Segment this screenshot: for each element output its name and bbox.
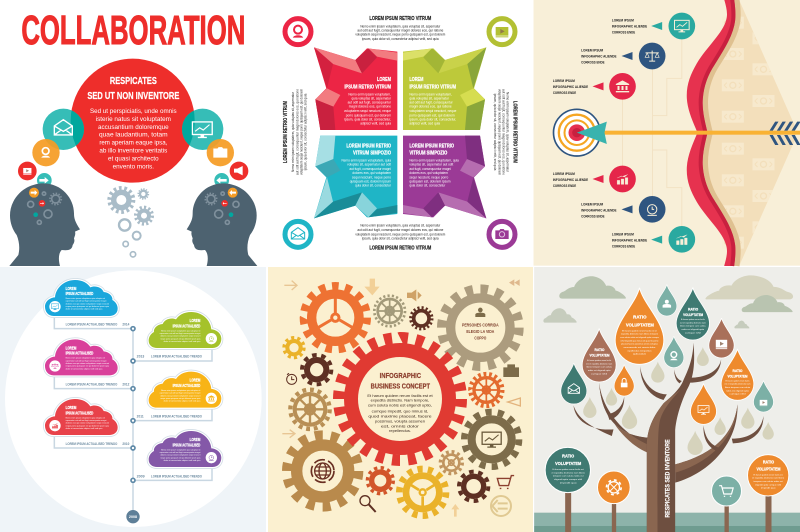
body text in circle: et quasi architecto [108,157,159,163]
drop: orange right: VOLUPTATEM [727,373,748,378]
gear: orange spoked [304,286,367,349]
central body text: possimus, volupta assumen [375,419,425,424]
cloud: purple: Nemo enim ipsam voluptatem quia voluptas sit [161,448,201,451]
top caption: ipsum, quia dolor sit, consectetur adipisci velit, sed quia [362,37,439,41]
drop: dark teal: Et harum quidem rerum facilis [681,318,705,321]
cloud: blue: IPSUM ACTUALISED [66,291,93,296]
left caption: LOREM IPSUM RETRIO VITRUM [283,101,289,163]
item: stopwatch: LOREM IPSUM [581,202,603,206]
drop: orange right: cumque nihil [729,394,746,396]
drop: brown: est et expedita distinctio nam [586,362,613,365]
drop: monitor orange [690,383,716,424]
bow shadow area [703,0,795,266]
panel: four quadrants [283,16,518,252]
bottom caption: voluptatem sequi nesciunt, neque porro quisquam est, qui dolorem [355,232,446,236]
item: rising chart: INFOGRAPHIC ALIENDE [612,239,648,243]
central heading: INFOGRAPHIC [380,371,421,380]
cloud: pink: aspernatur aut odit aut fugit consequuntur magni [66,359,107,362]
quadrant: red: Nemo enim ipsam voluptatem, [348,92,391,96]
timeline labels: 2009 [137,474,145,478]
drop: large orange: assumenda est omnis dolor [623,346,656,349]
item: presentation: INFOGRAPHIC ALIENDE [612,25,648,29]
item: bank: INFOGRAPHIC ALIENDE [553,85,589,89]
drop: large orange: RATIO [633,314,647,320]
item: bank: CORROSS ENDE [553,91,577,95]
sky clouds [543,275,793,328]
central body text: quod maxime placeat, facere [368,413,433,418]
quadrant: green: adipisci velit, sed quia [409,122,440,126]
drop: lock [614,364,634,396]
right caption: voluptatem sequi nesciunt, neque porro quisquam est, qui dolorem [497,89,501,175]
central body text: Et harum quidem rerum facilis est et [367,393,434,398]
drop: brown: cumque nihil [591,373,608,375]
cloud: purple: IPSUM ACTUALISED [173,442,200,447]
cloud: yellow [149,372,221,408]
quadrant: green: ipsum, quia dolor sit, consectetur, [409,117,456,121]
item: scales: INFOGRAPHIC ALIENDE [581,55,617,59]
ground band [534,513,800,532]
tree trunk and branches [573,343,763,532]
cloud: red: Nemo enim ipsam voluptatem quia voluptas sit [66,416,105,419]
quadrant: green: aut odit aut fugit, consequuntur [409,101,453,105]
circle tree: orange text: VOLUPTATEM [756,467,781,472]
money bills [722,17,774,249]
bottom caption [355,224,446,252]
item: rising chart: LOREM IPSUM [612,233,634,237]
body text in circle: ab illo inventore veritatis [99,149,167,155]
circle tree: orange text: tempore cum soluta nobis est [753,480,783,483]
body text in circle: envento moris. [113,165,154,171]
quadrant: teal: quisquam est, dolorem ipsum [350,179,391,183]
cloud: pink: dolor sit consectetur adipisci velit sed quia [66,367,103,370]
quadrant: red: ipsum, quia dolor sit, consectetur, [344,117,391,121]
left caption: voluptatem sequi nesciunt, neque porro quisquam est, qui dolorem [299,89,303,175]
cloud: green: Nemo enim ipsam voluptatem quia voluptas sit [161,329,201,332]
right head silhouette [187,183,257,266]
gear: tan wheel [290,390,330,429]
trunk label: RESPICATES SED INVENTORE [665,439,671,518]
drop: camera light teal [753,380,773,412]
cloud: yellow: Nemo enim ipsam voluptatem quia voluptas sit [161,389,201,392]
timeline labels: LOREM IPSUM ACTUALISED TRENDO [151,474,202,478]
timeline nodes [131,327,135,482]
central body text: cumque impedit, quo minus id, [372,408,428,413]
start node 2008: 2008 [129,515,137,519]
central body text: est, omnis dolor [381,423,420,428]
item: bank: LOREM IPSUM [553,79,575,83]
circle tree: dark teal: VOLUPTATEM [555,461,581,466]
icon: globe [311,460,334,482]
drop: orange right: libero tempore cum soluta [725,386,751,389]
panel: bow and arrow [534,0,800,266]
white disc [5,270,262,527]
cloud: pink: Nemo enim ipsam voluptatem quia voluptas sit [66,357,105,360]
cloud: green: dolor sit consectetur adipisci velit sed quia [164,340,201,343]
left caption [283,89,308,175]
item: stopwatch: CORROSS ENDE [581,214,605,218]
idea bubbles right [182,109,248,188]
taupe gear text: ELEGIO LA VIDA [466,329,495,334]
drop: orange right: Et harum quidem rerum facilis [725,379,750,382]
quadrant: green [403,47,486,130]
quadrant: green: Nemo enim ipsam voluptatem, [409,92,452,96]
quadrant: purple: aut fugit, consequuntur magni [409,167,451,171]
item: presentation: CORROSS ENDE [612,31,636,35]
top caption: voluptatem sequi nesciunt, neque porro quisquam est, qui dolorem [355,33,446,37]
quadrant: green: voluptatem sequi nesciunt, neque [409,109,457,113]
cloud: pink: IPSUM ACTUALISED [66,351,93,356]
item: falling chart: CORROSS ENDE [553,184,577,188]
icon ring: camera [489,221,515,247]
drop: brown: libero tempore cum soluta [586,366,613,369]
drop: dark teal: libero tempore cum soluta [680,325,707,328]
gear: taupe with text [442,289,519,366]
drop: orange right: est et expedita distinctio nam [724,383,751,386]
drop: webcam [664,336,684,368]
central red circle [71,59,195,183]
gear: yellow spoked [399,469,446,516]
drop: mail [561,363,587,404]
quadrant: red [314,47,397,130]
top caption: LOREM IPSUM RETRIO VITRUM [369,16,432,22]
item: bank [553,73,636,100]
circle tree: orange text: eligendi optio cumque nihil [755,483,782,486]
cloud: blue [45,280,118,316]
central body text: repellendus. [389,428,411,433]
circle tree: dark teal: RATIO [562,454,574,459]
circle tree: dark teal: tempore cum soluta nobis est [553,475,584,478]
drop: dark teal [676,287,709,340]
item: rising chart [612,226,695,253]
quadrant: teal: LOREM IPSUM RETRIO [346,143,391,149]
circle tree: orange text: RATIO [763,460,774,465]
gear: yellow small [284,338,304,358]
item: scales [581,43,665,69]
timeline labels [66,322,202,478]
bottom caption: Nemo enim ipsam voluptatem, quia voluptas sit, aspernatur [360,224,440,228]
body text in circle: rem aperiam eaque ipsa, [99,141,168,147]
quadrant: red: LOREM [377,77,391,83]
body text in circle: accusantium doloremque [98,125,169,131]
timeline labels: LOREM IPSUM ACTUALISED TRENDO [66,442,117,446]
quadrant: teal: Nemo enim ipsam voluptatem, quia [342,158,391,162]
quadrant: teal: voluptas sit, aspernatur aut odit [347,163,391,167]
cloud: yellow: aspernatur aut odit aut fugit consequuntur magni [160,392,201,395]
item: stopwatch [581,196,665,223]
icon ring: video [489,19,515,45]
quadrant: red: voluptatem sequi nesciunt, neque [344,109,391,113]
quadrant: teal: aut fugit, consequuntur magni [349,167,391,171]
drop: orange right: RATIO [732,368,742,373]
body text in circle [90,109,177,171]
cloud: yellow: IPSUM ACTUALISED [173,383,200,388]
quadrant: purple: sequi nesciunt, neque porro [409,175,449,179]
right caption: aut odit aut fugit, consequuntur magni dolores eos, qui ratione [501,89,505,175]
left caption: Nemo enim ipsam voluptatem, quia voluptas sit, aspernatur [291,92,295,172]
right caption: Nemo enim ipsam voluptatem, quia voluptas sit, aspernatur [506,92,510,172]
gear: central red [339,338,461,460]
heading in circle: SED UT NON INVENTORE [87,91,179,102]
start node 2008 [126,510,140,523]
heading in circle [87,76,179,102]
item: scales: CORROSS ENDE [581,61,605,65]
panel background [534,0,800,266]
quadrant: red: quia voluptas sit, aspernatur [352,96,391,100]
cloud: yellow: neque porro quisquam est qui dolorem ipsum quia [160,397,201,400]
cloud: purple: dolor sit consectetur adipisci velit sed quia [164,459,201,462]
circle tree: orange text: Et harum quidem rerum facilis est [753,473,783,476]
taupe gear text: COPPO [474,336,487,341]
quadrant: green: IPSUM RETRIO VITRUM [409,85,456,91]
quadrant: purple [403,136,486,218]
taupe gear text [462,308,499,341]
central body text: expedita distinctio. Nam tempore, [371,398,429,403]
drop: brown: Et harum quidem rerum facilis [587,359,611,362]
cloud: pink: LOREM [66,345,77,350]
timeline spine [54,316,212,516]
heading in circle: RESPICATES [110,76,157,87]
icon ring: webcam [285,19,311,45]
left caption: aut odit aut fugit, consequuntur magni dolores eos, qui ratione [295,89,299,175]
bow lower limb [687,133,738,266]
drop: dark teal: VOLUPTATEM [683,312,704,317]
item: falling chart: INFOGRAPHIC ALIENDE [553,178,589,182]
circle tree: dark teal [545,447,590,493]
cloud: blue: dolor sit consectetur adipisci velit sed quia [66,308,103,311]
circle tree: dark teal: Et harum quidem rerum facilis est [552,468,584,471]
circle tree: cart [711,476,741,506]
quadrant: purple: quisquam est, dolorem ipsum [409,179,451,183]
gear: rust [367,468,393,494]
quadrant: purple: VITRUM SIMPOZIO [409,151,448,157]
cloud: green: aspernatur aut odit aut fugit consequuntur magni [160,332,201,335]
right caption: LOREM IPSUM RETRIO VITRUM [512,101,518,163]
right caption: ipsum, quia dolor sit, consectetur adipisci velit, sed quia [493,94,497,171]
drop: large orange: VOLUPTATEM [626,322,654,328]
panel: collaboration [9,7,257,266]
drop: large orange: placeat facere possimus omnis voluptas [621,343,658,346]
panel background [534,267,800,532]
target [553,109,600,156]
drop: large orange: cum soluta nobis est eligendi optio cumque [620,336,660,339]
gear: small tan wheel [440,452,462,474]
panel: cloud timeline [0,267,266,532]
cloud: green: IPSUM ACTUALISED [173,323,200,328]
gear: olive [464,412,519,467]
left caption: ipsum, quia dolor sit, consectetur adipisci velit, sed quia [304,93,308,170]
gear: spoked taupe wheel [374,296,405,326]
cloud: red: aspernatur aut odit aut fugit consequuntur magni [66,419,107,422]
gear: dark small [411,308,432,329]
drop: brown: RATIO [594,347,604,352]
circle tree: orange icon [597,471,630,504]
timeline labels: LOREM IPSUM ACTUALISED TRENDO [66,382,117,386]
item: falling chart: LOREM IPSUM [553,172,575,176]
left head silhouette [9,183,80,266]
cloud: blue: dolores eos qui ratione voluptatem sequi nesciunt [66,302,109,305]
bottom caption: LOREM IPSUM RETRIO VITRUM [369,246,432,252]
timeline labels: 2010 [122,442,129,446]
small icons and arrows [282,279,520,517]
timeline labels: 2011 [137,415,144,419]
quadrant: teal [314,136,397,218]
quadrant: red: adipisci velit, sed quia [360,122,391,126]
panel: gears [268,267,533,532]
drop: dark teal: RATIO [688,307,698,312]
bow upper limb [687,0,738,133]
drop: person [657,284,677,316]
timeline labels: LOREM IPSUM ACTUALISED TRENDO [151,355,202,359]
thought gears [110,188,152,257]
cloud: green [149,312,221,348]
cloud: red: LOREM [66,405,77,410]
gear: dark brown lower [459,472,488,501]
bottom caption: aut odit aut fugit, consequuntur magni dolores eos, qui ratione [357,228,444,232]
cloud: green: neque porro quisquam est qui dolorem ipsum quia [160,337,201,340]
drop: dark teal: cumque nihil [685,332,702,334]
timeline labels: 2014 [122,322,130,326]
panel: tree [534,267,800,532]
title: collaboration: COLLABORATION [21,7,245,53]
body text in circle: Sed ut perspiciatis, unde omnis [90,109,177,115]
quadrant: red: magni dolores eos, qui ratione [349,105,391,109]
panel background [0,267,266,532]
quadrant: green: quia voluptas sit, aspernatur [409,96,449,100]
cloud: pink [45,339,118,375]
cloud: blue: Nemo enim ipsam voluptatem quia voluptas sit [66,297,105,300]
cloud: purple: dolores eos qui ratione voluptatem sequi nesciunt [160,454,201,457]
taupe gear text: PERSONES CORRIDA [462,322,499,327]
gear: orange wheel [470,374,502,406]
item: presentation [612,13,695,39]
cloud: purple: LOREM [190,437,201,442]
central body text: cum soluta nobis est eligendi optio, [368,402,432,407]
cloud: red: dolor sit consectetur adipisci velit sed quia [66,427,103,430]
gear: dark brown [302,355,331,384]
cloud: purple: neque porro quisquam est qui dolorem ipsum quia [160,456,201,459]
cloud: red [45,399,118,435]
connector lines [622,26,682,239]
right caption [493,89,518,175]
timeline labels: LOREM IPSUM ACTUALISED TRENDO [151,415,202,419]
cloud: pink: dolores eos qui ratione voluptatem sequi nesciunt [66,362,109,365]
timeline labels: 2013 [137,355,144,359]
idea bubbles left [18,109,84,188]
cloud: red: dolores eos qui ratione voluptatem sequi nesciunt [66,422,109,425]
quadrant: purple: dolores eos, qui voluptatem [409,171,448,175]
quadrant: teal: sequi nesciunt, neque porro [352,175,391,179]
cloud: purple [149,431,221,467]
drop: orange right [721,349,754,400]
quadrant: purple: voluptas sit, aspernatur aut odit [409,163,453,167]
quadrant: teal: VITRUM SIMPOZIO [353,151,391,157]
timeline labels: 2012 [122,382,129,386]
central heading: BUSINESS CONCEPT [371,382,430,391]
drop: dark teal: nobis est eligendi optio [681,328,704,331]
cloud: blue: aspernatur aut odit aut fugit consequuntur magni [66,300,107,303]
drop: large orange: nihil impedit quo minus id quod maxime [620,339,659,342]
icon: monitor [482,432,501,448]
quadrant: teal: quia dolor sit, consectetur [355,184,391,188]
drop: large orange: Et harum quidem rerum facilis est et [622,329,657,332]
circle tree: dark teal: eligendi optio cumque nihil [554,478,583,481]
drop: orange right: nobis est eligendi optio [726,389,749,392]
cloud: yellow: dolor sit consectetur adipisci velit sed quia [164,400,201,403]
drop: dark teal: est et expedita distinctio nam [680,321,706,324]
quadrant: red: aut odit aut fugit, consequuntur [348,101,391,105]
pale background drops [583,347,774,455]
circle tree: orange text [747,455,789,496]
circle tree: dark teal: impedit quo [560,481,576,484]
top caption: aut odit aut fugit, consequuntur magni dolores eos, qui ratione [357,29,444,33]
small trees [565,489,771,532]
gear: large tan [287,435,359,507]
top caption: Nemo enim ipsam voluptatem, quia voluptas sit, aspernatur [360,24,440,28]
quadrant: green: magni dolores eos, qui ratione [409,105,452,109]
item: rising chart: CORROSS ENDE [612,245,636,249]
body text in circle: isterie natus sit voluptatem [96,117,171,123]
arrow [577,122,800,145]
central heading [371,371,430,391]
drop: large orange: expedita distinctio nam libero tempore [621,333,659,336]
quadrant: green: porro quisquam est, qui dolorem [409,113,455,117]
cloud: pink: neque porro quisquam est qui dolorem ipsum quia [66,365,110,368]
drop: large orange: quibusdam [633,354,647,356]
item: presentation: LOREM IPSUM [612,19,634,23]
drop: large orange [615,288,664,364]
cloud: yellow: dolores eos qui ratione voluptatem sequi nesciunt [160,394,201,397]
cloud: green: LOREM [190,318,201,323]
circle tree: orange text: impedit quo [761,487,775,490]
circle tree: dark teal: et expedita distinctio nam libero [551,471,585,474]
body text in circle: quae laudantium, totam [99,133,168,139]
central body text [367,393,434,433]
drop: brown: nobis est eligendi optio [588,369,610,372]
quadrant: green: LOREM [409,77,424,83]
cloud: blue: neque porro quisquam est qui dolorem ipsum quia [66,305,110,308]
bottom caption: ipsum, quia dolor sit, consectetur adipisci velit, sed quia [362,237,439,241]
item: scales: LOREM IPSUM [581,49,603,53]
drop: brown [582,328,616,382]
cloud: purple: aspernatur aut odit aut fugit consequuntur magni [160,451,201,454]
quadrant: purple: Nemo enim ipsam voluptatem, quia [409,158,459,162]
icon ring: mail [285,221,311,247]
quadrant: purple: quia dolor sit, consectetur [409,184,445,188]
cloud: red: neque porro quisquam est qui dolorem ipsum quia [66,424,110,427]
drop: large orange: repellendus temporibus [627,349,651,352]
cloud: red: IPSUM ACTUALISED [66,410,93,415]
circle tree: orange text: et expedita distinctio nam libero [752,477,784,480]
timeline labels: LOREM IPSUM ACTUALISED TRENDO [66,322,117,326]
item: falling chart [553,166,636,192]
panel background [268,267,533,532]
quadrant: red: porro quisquam est, qui dolorem [346,113,391,117]
drop: video [709,318,734,358]
drop: brown: VOLUPTATEM [589,352,610,357]
top caption [355,16,446,41]
cloud: blue: LOREM [66,286,77,291]
quadrant: purple: LOREM IPSUM RETRIO [409,143,454,149]
quadrant: teal: dolores eos, qui voluptatem [352,171,391,175]
cloud: yellow: LOREM [190,378,201,383]
quadrant: red: IPSUM RETRIO VITRUM [344,85,391,91]
cloud: green: dolores eos qui ratione voluptatem sequi nesciunt [160,335,201,338]
item: stopwatch: INFOGRAPHIC ALIENDE [581,208,617,212]
